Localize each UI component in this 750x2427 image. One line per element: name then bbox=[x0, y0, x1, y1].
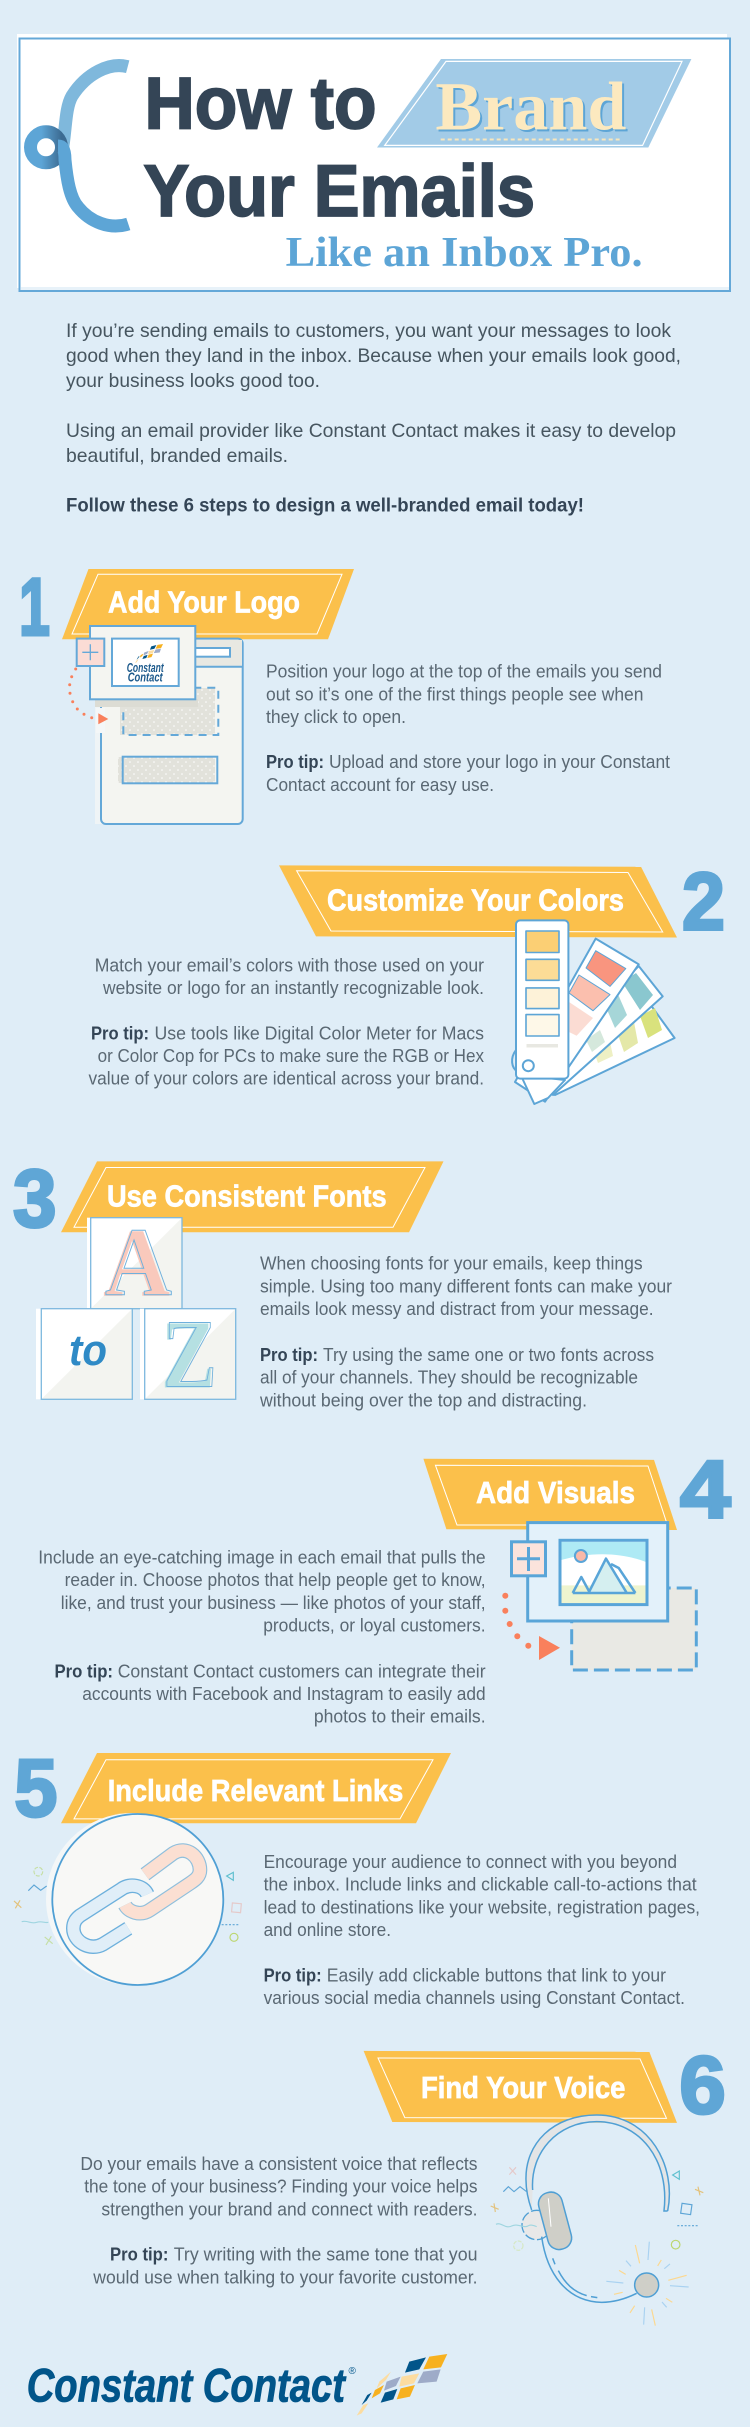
banner: Use Consistent Fonts: Use Consistent Fonts bbox=[107, 1178, 387, 1214]
step 5 text: and online store. bbox=[264, 1920, 391, 1940]
banner: Customize Your Colors bbox=[279, 865, 677, 938]
banner: Add Visuals: Add Visuals bbox=[476, 1475, 635, 1510]
step 3 text: all of your channels. They should be recognizable bbox=[260, 1367, 638, 1387]
step 4 text: accounts with Facebook and Instagram to easily add bbox=[82, 1684, 486, 1704]
step 3 panel bbox=[13, 1153, 672, 1410]
banner: Brand: Brand bbox=[435, 69, 626, 145]
footer logo: Constant Contact bbox=[27, 2359, 347, 2412]
step 1 text: Pro tip: bbox=[266, 752, 324, 772]
title: Your Emails: Your Emails bbox=[144, 151, 535, 232]
banner: Use Consistent Fonts bbox=[61, 1161, 444, 1232]
block to: to bbox=[69, 1326, 107, 1375]
step 1 text: they click to open. bbox=[266, 707, 406, 727]
header panel bbox=[17, 34, 730, 291]
banner: Brand: Brand bbox=[437, 71, 628, 147]
banner: Find Your Voice bbox=[364, 2051, 677, 2123]
step 3 text: Try using the same one or two fonts across bbox=[323, 1345, 654, 1365]
step 5 panel bbox=[14, 1743, 700, 2008]
block A: A bbox=[103, 1210, 170, 1317]
intro text: good when they land in the inbox. Because when your emails look good, bbox=[66, 345, 681, 367]
dotted arrow bbox=[502, 1593, 560, 1660]
illustration: add image bbox=[502, 1523, 696, 1670]
illustration: chain link bbox=[46, 1813, 223, 1985]
step 1 text: Contact account for easy use. bbox=[266, 775, 494, 795]
banner: Brand bbox=[377, 59, 691, 148]
step 6 panel bbox=[80, 2040, 726, 2326]
banner: Include Relevant Links bbox=[61, 1753, 451, 1823]
banner: Add Visuals bbox=[423, 1459, 677, 1530]
step 2 text: value of your colors are identical across your brand. bbox=[88, 1069, 484, 1089]
block A: A bbox=[105, 1209, 172, 1316]
step 4 text: like, and trust your business — like photos of your staff, bbox=[61, 1593, 486, 1613]
decorative shapes around headset bbox=[491, 2167, 703, 2250]
step 6 text: would use when talking to your favorite customer. bbox=[92, 2267, 478, 2287]
banner: Add Your Logo bbox=[62, 569, 354, 639]
intro text bbox=[66, 320, 681, 516]
step 4 panel bbox=[38, 1444, 731, 1726]
illustration: colour swatch fan bbox=[512, 920, 675, 1104]
block Z: Z bbox=[163, 1300, 217, 1407]
number 4: 4 bbox=[680, 1444, 731, 1535]
step 2 text: Use tools like Digital Color Meter for Macs bbox=[154, 1023, 484, 1043]
intro text: Using an email provider like Constant Contact makes it easy to develop bbox=[66, 420, 676, 442]
step 6 text: Pro tip: bbox=[110, 2245, 168, 2265]
step 4 text bbox=[38, 1548, 486, 1726]
step 2 text: Match your email’s colors with those used on your bbox=[95, 955, 484, 975]
step 3 text: without being over the top and distracting. bbox=[259, 1390, 587, 1410]
decorative shapes around link bbox=[14, 1867, 241, 1945]
block to bbox=[36, 1309, 132, 1399]
step 5 text: lead to destinations like your website, registration pages, bbox=[264, 1898, 700, 1918]
step 2 text: website or logo for an instantly recognizable look. bbox=[102, 978, 484, 998]
title: How to: How to bbox=[144, 64, 376, 145]
step 4 text: Constant Contact customers can integrate their bbox=[118, 1661, 486, 1681]
step 1 text bbox=[266, 662, 670, 795]
banner: Customize Your Colors: Customize Your Colors bbox=[327, 883, 624, 918]
block Z bbox=[140, 1300, 236, 1408]
step 5 text: various social media channels using Constant Contact. bbox=[264, 1988, 685, 2008]
step 6 text: Do your emails have a consistent voice that reflects bbox=[80, 2154, 478, 2174]
step 1 panel bbox=[19, 562, 670, 824]
step 4 text: Include an eye-catching image in each email that pulls the bbox=[38, 1548, 486, 1568]
logo mark bbox=[357, 2354, 447, 2416]
step 6 text: Try writing with the same tone that you bbox=[174, 2245, 477, 2265]
plus box bbox=[77, 639, 104, 666]
banner: Find Your Voice: Find Your Voice bbox=[421, 2070, 625, 2105]
step 5 text: Encourage your audience to connect with you beyond bbox=[264, 1852, 677, 1872]
step 5 text: Pro tip: bbox=[264, 1966, 322, 1986]
step 6 text bbox=[80, 2154, 478, 2287]
number 6: 6 bbox=[679, 2040, 726, 2131]
step 5 text: Easily add clickable buttons that link to your bbox=[327, 1966, 666, 1986]
step 4 text: Pro tip: bbox=[54, 1661, 113, 1681]
step 6 text: the tone of your business? Finding your voice helps bbox=[84, 2177, 477, 2197]
step 3 text: Pro tip: bbox=[260, 1345, 318, 1365]
illustration: headset bbox=[522, 2115, 689, 2326]
step 4 text: reader in. Choose photos that help people get to know, bbox=[65, 1570, 486, 1590]
intro text: your business looks good too. bbox=[66, 370, 320, 392]
logo card: Constant bbox=[127, 660, 164, 675]
step 4 text: products, or loyal customers. bbox=[263, 1616, 486, 1636]
plus box bbox=[512, 1542, 546, 1576]
step 3 text: simple. Using too many different fonts can make your bbox=[260, 1277, 672, 1297]
step 1 text: Upload and store your logo in your Constant bbox=[329, 752, 670, 772]
subtitle: Like an Inbox Pro. bbox=[286, 230, 643, 276]
logo card: Contact bbox=[128, 669, 163, 684]
step 3 text: When choosing fonts for your emails, keep things bbox=[260, 1254, 643, 1274]
number 5: 5 bbox=[14, 1743, 57, 1834]
block Z: Z bbox=[161, 1301, 215, 1408]
logo card bbox=[112, 639, 179, 686]
step 2 panel bbox=[88, 857, 725, 1104]
intro text: If you’re sending emails to customers, you want your messages to look bbox=[66, 320, 671, 342]
step 2 text bbox=[88, 955, 484, 1089]
step 2 text: or Color Cop for PCs to make sure the RGB or Hex bbox=[98, 1046, 484, 1066]
illustration: letter blocks bbox=[36, 1209, 236, 1408]
intro text: beautiful, branded emails. bbox=[66, 445, 288, 467]
intro text: Follow these 6 steps to design a well-branded email today! bbox=[66, 494, 584, 516]
step 3 text bbox=[259, 1254, 672, 1410]
step 5 text bbox=[264, 1852, 700, 2008]
image frame bbox=[560, 1540, 647, 1605]
illustration: email with logo bbox=[68, 626, 243, 824]
step 2 text: Pro tip: bbox=[91, 1023, 149, 1043]
step 6 text: strengthen your brand and connect with readers. bbox=[101, 2199, 478, 2219]
step 1 text: out so it’s one of the first things people see when bbox=[266, 684, 644, 704]
banner: Include Relevant Links: Include Relevant Links bbox=[108, 1773, 403, 1808]
step 4 text: photos to their emails. bbox=[314, 1706, 486, 1726]
footer logo: ® bbox=[348, 2366, 356, 2377]
number 1: 1 bbox=[19, 562, 50, 653]
icon: bracket with ring bbox=[30, 66, 128, 226]
dotted arrow bbox=[68, 668, 108, 724]
number 2: 2 bbox=[682, 857, 725, 948]
step 3 text: emails look messy and distract from your message. bbox=[260, 1299, 654, 1319]
step 5 text: the inbox. Include links and clickable call-to-actions that bbox=[264, 1874, 697, 1894]
step 1 text: Position your logo at the top of the emails you send bbox=[266, 662, 662, 682]
banner: Add Your Logo: Add Your Logo bbox=[108, 584, 300, 620]
number 3: 3 bbox=[13, 1153, 56, 1244]
